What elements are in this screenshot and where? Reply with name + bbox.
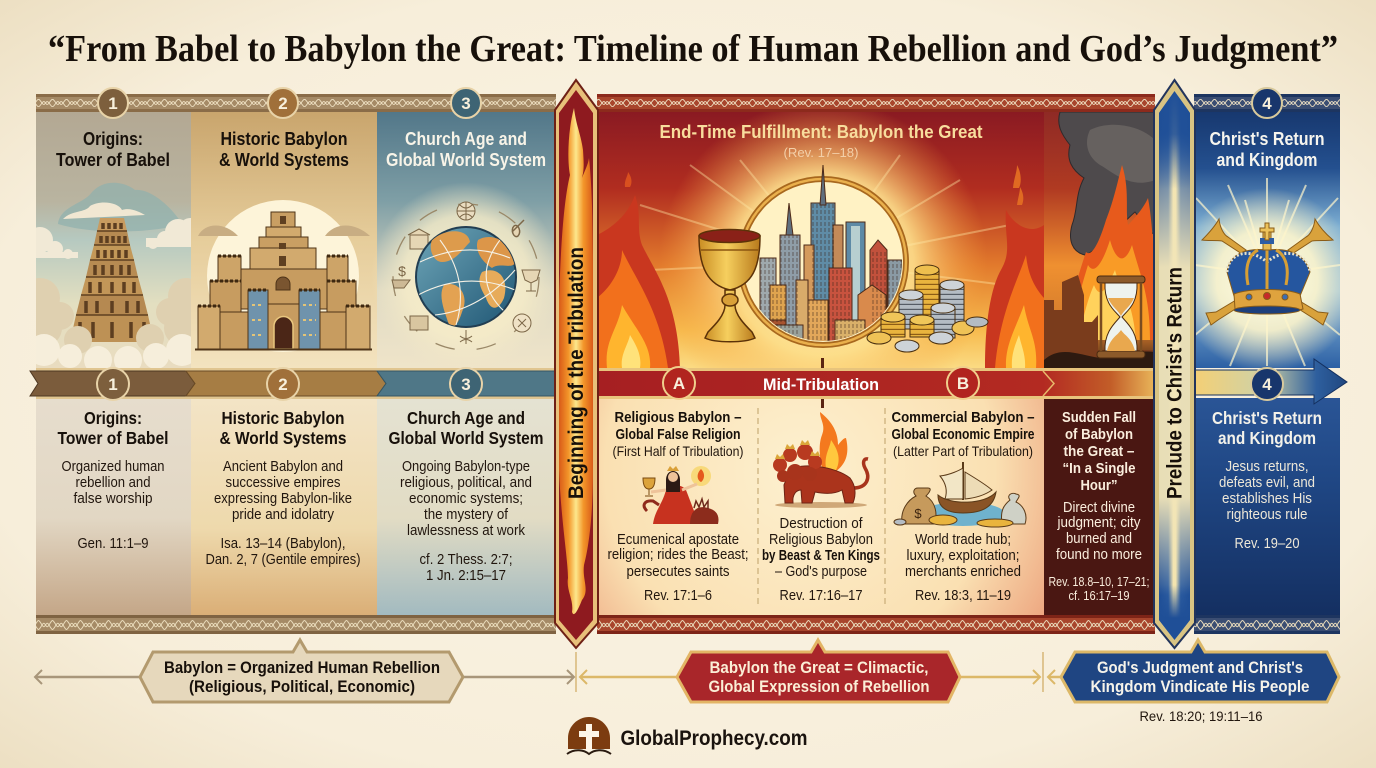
number badges on timeline	[97, 367, 1283, 400]
flames	[1078, 165, 1153, 340]
icon: globe with surrounding symbols	[392, 202, 540, 350]
heading: christ's return	[1210, 129, 1324, 170]
callout: god's judgment: God's Judgment and Christ's	[1097, 658, 1303, 677]
icon: globe with surrounding symbols: $	[398, 263, 406, 279]
callout: babylon the great: Babylon the Great = Climactic,	[710, 658, 928, 677]
reference: rev. 18:20; 19:11-16: Rev. 18:20; 19:11–16	[1140, 708, 1263, 724]
timeline ribbon	[30, 359, 1347, 404]
heading: church age: Church Age and	[405, 129, 527, 149]
block: commercial babylon: Commercial Babylon –	[892, 409, 1034, 426]
flame column	[559, 108, 593, 614]
lower panel: sudden fall: of Babylon	[1065, 426, 1133, 443]
lower panel: historic babylon: successive empires	[226, 474, 340, 491]
number badges on timeline: 3	[461, 375, 471, 394]
heading: origins: Tower of Babel	[56, 150, 170, 170]
icon: city in circle	[740, 165, 906, 348]
label: Prelude to Christ's Return	[1164, 267, 1186, 499]
lower panel: church age: the mystery of	[424, 506, 509, 523]
icon: hourglass	[1097, 276, 1145, 358]
icon: dome, cross and book	[567, 717, 611, 754]
callout: organized human rebellion: (Religious, Political, Economic)	[189, 677, 415, 696]
lower panel: church age: Church Age and	[407, 408, 525, 428]
block: destruction by beast	[762, 412, 880, 604]
lower panel: christ's kingdom: righteous rule	[1226, 506, 1308, 523]
icon: seven-headed beast with flame	[773, 412, 868, 508]
lower panel: christ's kingdom: and Kingdom	[1218, 428, 1316, 448]
number badges on top band: 3	[461, 94, 471, 113]
heading: christ's return: and Kingdom	[1216, 150, 1318, 170]
lower panel: christ's kingdom	[1194, 398, 1340, 616]
icon: woman riding the beast	[643, 466, 719, 524]
lower panel: sudden fall: judgment; city	[1057, 514, 1141, 531]
number badges on top band: 4	[1262, 94, 1272, 113]
lower panel: sudden fall: found no more	[1056, 546, 1142, 563]
icon: tower of babel	[36, 182, 191, 368]
block: destruction by beast: Religious Babylon	[769, 531, 873, 548]
heading: end-time fulfillment	[660, 122, 982, 160]
block: commercial babylon: merchants enriched	[905, 563, 1021, 580]
icon: merchant ship and treasure	[894, 462, 1026, 527]
block: destruction by beast: by Beast & Ten Kings	[762, 547, 880, 564]
icon: merchant ship and treasure: $	[914, 506, 922, 521]
block: destruction by beast: Rev. 17:16–17	[780, 587, 862, 604]
icon: golden chalice	[699, 230, 760, 342]
callout: babylon the great	[677, 640, 960, 702]
callout: babylon the great: Global Expression of Rebellion	[708, 677, 930, 696]
icon: crown and trumpets	[1202, 219, 1333, 325]
lower panel: church age: lawlessness at work	[407, 522, 525, 539]
lower panel: origins: Gen. 11:1–9	[78, 535, 148, 552]
lower panel: historic babylon	[191, 398, 377, 616]
block: religious babylon: Religious Babylon –	[614, 409, 742, 426]
lower panel: christ's kingdom: Jesus returns,	[1226, 458, 1308, 475]
lower panel: historic babylon: Isa. 13–14 (Babylon),	[220, 535, 346, 552]
lower panel: sudden fall: Direct divine	[1063, 499, 1135, 516]
lower panel: origins: rebellion and	[76, 474, 150, 491]
lower panel: origins: false worship	[74, 490, 152, 507]
panel: church age illustration	[371, 112, 561, 372]
heading: end-time fulfillment: End-Time Fulfillment: Babylon the Great	[660, 122, 982, 142]
lower panel: church age: cf. 2 Thess. 2:7;	[420, 551, 512, 568]
lower panel: sudden fall	[1044, 398, 1155, 616]
lower panel: sudden fall: Hour”	[1080, 477, 1118, 494]
lower panel: tribulation detail	[597, 398, 1044, 616]
lower panel: historic babylon: Historic Babylon	[222, 408, 344, 428]
logo: globalprophecy.com: GlobalProphecy.com	[620, 727, 808, 750]
callout: organized human rebellion	[140, 640, 463, 702]
lower panel: sudden fall: Rev. 18.8–10, 17–21;	[1048, 575, 1150, 589]
callout: god's judgment	[1061, 640, 1339, 702]
label: Beginning of the Tribulation	[565, 247, 588, 499]
panel: origins illustration	[36, 112, 191, 368]
lower panel: sudden fall: cf. 16:17–19	[1068, 589, 1130, 603]
flames left	[597, 172, 680, 368]
heading: church age	[386, 129, 546, 170]
block: religious babylon: (First Half of Tribulation)	[612, 443, 744, 459]
number badges on timeline: 1	[108, 375, 118, 394]
callout: god's judgment: Kingdom Vindicate His People	[1090, 677, 1310, 696]
block: destruction by beast: Destruction of	[780, 515, 863, 532]
lower panel: church age: religious, political, and	[400, 474, 532, 491]
glow and rays	[1196, 178, 1340, 368]
lower panel: origins: Organized human	[62, 458, 164, 475]
panel: end-time fulfillment illustration	[597, 112, 1044, 369]
lower panel: sudden fall: Sudden Fall	[1062, 409, 1136, 426]
block: commercial babylon: Global Economic Empire	[892, 426, 1034, 443]
lower panel: christ's kingdom: establishes His	[1222, 490, 1312, 507]
lower panel: origins	[36, 398, 191, 616]
heading: historic babylon	[219, 129, 349, 170]
logo: globalprophecy.com	[567, 717, 808, 754]
heading: end-time fulfillment: (Rev. 17–18)	[784, 145, 858, 160]
block: religious babylon: persecutes saints	[626, 563, 730, 580]
icon: coin stacks	[867, 265, 988, 352]
lower panel: sudden fall: “In a Single	[1062, 460, 1136, 477]
heading: church age: Global World System	[386, 150, 546, 170]
block: religious babylon: Rev. 17:1–6	[644, 587, 712, 604]
block: religious babylon: religion; rides the Beast;	[608, 546, 748, 563]
lower panel: church age: 1 Jn. 2:15–17	[426, 567, 506, 584]
smoke cloud	[1059, 112, 1155, 255]
divider: beginning of the tribulation	[555, 80, 598, 648]
heading: origins	[56, 129, 170, 170]
number badges on timeline: 2	[278, 375, 288, 394]
block: destruction by beast: – God's purpose	[775, 563, 867, 580]
panel: historic babylon illustration	[191, 112, 377, 368]
lower panel: church age	[377, 398, 556, 616]
flames right	[985, 165, 1044, 368]
heading: historic babylon: & World Systems	[219, 150, 349, 170]
lower panel: historic babylon: Dan. 2, 7 (Gentile empires)	[206, 551, 360, 568]
lower panel: christ's kingdom: Christ's Return	[1212, 408, 1322, 428]
tick to timeline	[821, 358, 824, 369]
lower panel: origins: Tower of Babel	[58, 428, 168, 448]
block: religious babylon	[608, 409, 748, 604]
number badges on timeline: A	[673, 374, 685, 393]
top ornamental border	[36, 94, 1340, 112]
range arrows	[35, 652, 1061, 692]
heading: historic babylon: Historic Babylon	[220, 129, 348, 149]
number badges on timeline: 4	[1262, 375, 1272, 394]
lower panel: sudden fall: the Great –	[1064, 443, 1134, 460]
lower panel: historic babylon: Ancient Babylon and	[223, 458, 343, 475]
lower panel: sudden fall: burned and	[1066, 530, 1132, 547]
block: commercial babylon: luxury, exploitation;	[906, 547, 1020, 564]
lower panel: historic babylon: pride and idolatry	[232, 506, 334, 523]
lower panel: historic babylon: & World Systems	[220, 428, 347, 448]
block: commercial babylon: (Latter Part of Tribulation)	[893, 443, 1033, 459]
lower panel: church age: Global World System	[388, 428, 544, 448]
panel: christ's return illustration	[1196, 112, 1340, 368]
block: religious babylon: Ecumenical apostate	[617, 531, 739, 548]
lower panel: church age: economic systems;	[409, 490, 523, 507]
block: commercial babylon: Rev. 18:3, 11–19	[915, 587, 1011, 604]
number badges on top band: 2	[278, 94, 288, 113]
number badges on top band: 1	[108, 94, 118, 113]
heading: christ's return: Christ's Return	[1210, 129, 1324, 149]
number badges on timeline: B	[957, 374, 969, 393]
block: religious babylon: Global False Religion	[616, 426, 740, 443]
lower panel: christ's kingdom: Rev. 19–20	[1234, 535, 1300, 552]
block: commercial babylon	[892, 409, 1034, 604]
block: commercial babylon: World trade hub;	[915, 531, 1011, 548]
heading: origins: Origins:	[83, 129, 143, 149]
lower panel: origins: Origins:	[84, 408, 142, 428]
lower panel: historic babylon: expressing Babylon-like	[214, 490, 352, 507]
lower panel: christ's kingdom: defeats evil, and	[1219, 474, 1315, 491]
number badges on top band	[98, 88, 1282, 118]
ruined city	[1044, 275, 1155, 370]
panel: fire and hourglass	[1044, 112, 1155, 370]
divider: prelude to christ's return	[1154, 80, 1195, 648]
callout: organized human rebellion: Babylon = Organized Human Rebellion	[164, 658, 440, 677]
lower panel: church age: Ongoing Babylon-type	[402, 458, 530, 475]
bottom ornamental border	[36, 615, 1340, 634]
label: mid-tribulation: Mid-Tribulation	[763, 375, 879, 394]
icon: babylon city and ishtar gate	[195, 200, 372, 352]
